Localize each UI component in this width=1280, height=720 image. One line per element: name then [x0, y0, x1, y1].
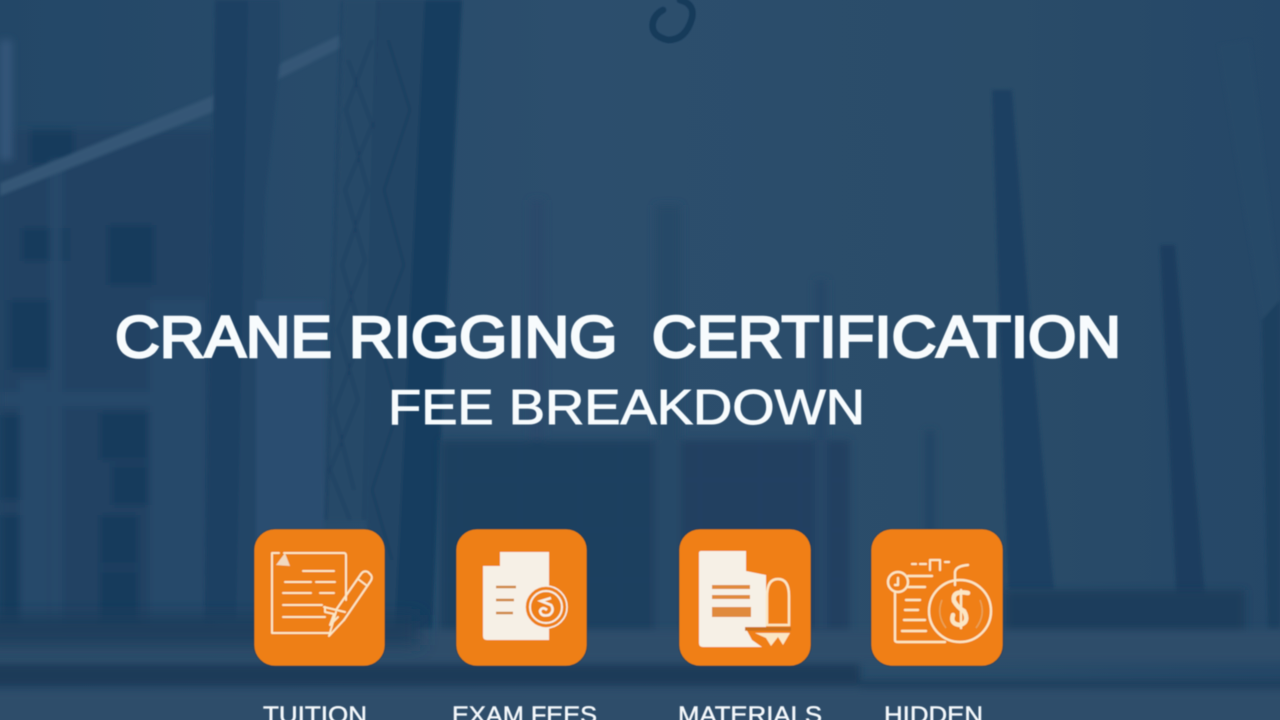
ground bands — [0, 630, 1280, 720]
hook at the top — [653, 0, 692, 40]
title line 1: CRANE RIGGING CERTIFICATION — [115, 305, 1121, 370]
icon tile: exam fees — [456, 529, 587, 666]
icon tile: materials — [679, 529, 811, 666]
title — [115, 305, 1121, 435]
icon: document and coin — [483, 552, 549, 640]
icon tile: tuition — [254, 529, 385, 666]
title line 2: FEE BREAKDOWN — [388, 381, 865, 435]
building on the left — [0, 40, 215, 640]
right-side towers — [992, 40, 1280, 630]
distant columns — [440, 200, 935, 635]
icon: checklist, clock and dollar coin — [888, 560, 991, 642]
icon: document and tube — [699, 551, 766, 647]
crane boom diagonal — [0, 35, 342, 196]
icon tile: hidden — [871, 529, 1003, 666]
category labels — [263, 702, 983, 720]
icon: document and pencil — [272, 553, 372, 636]
tower columns — [205, 0, 462, 630]
